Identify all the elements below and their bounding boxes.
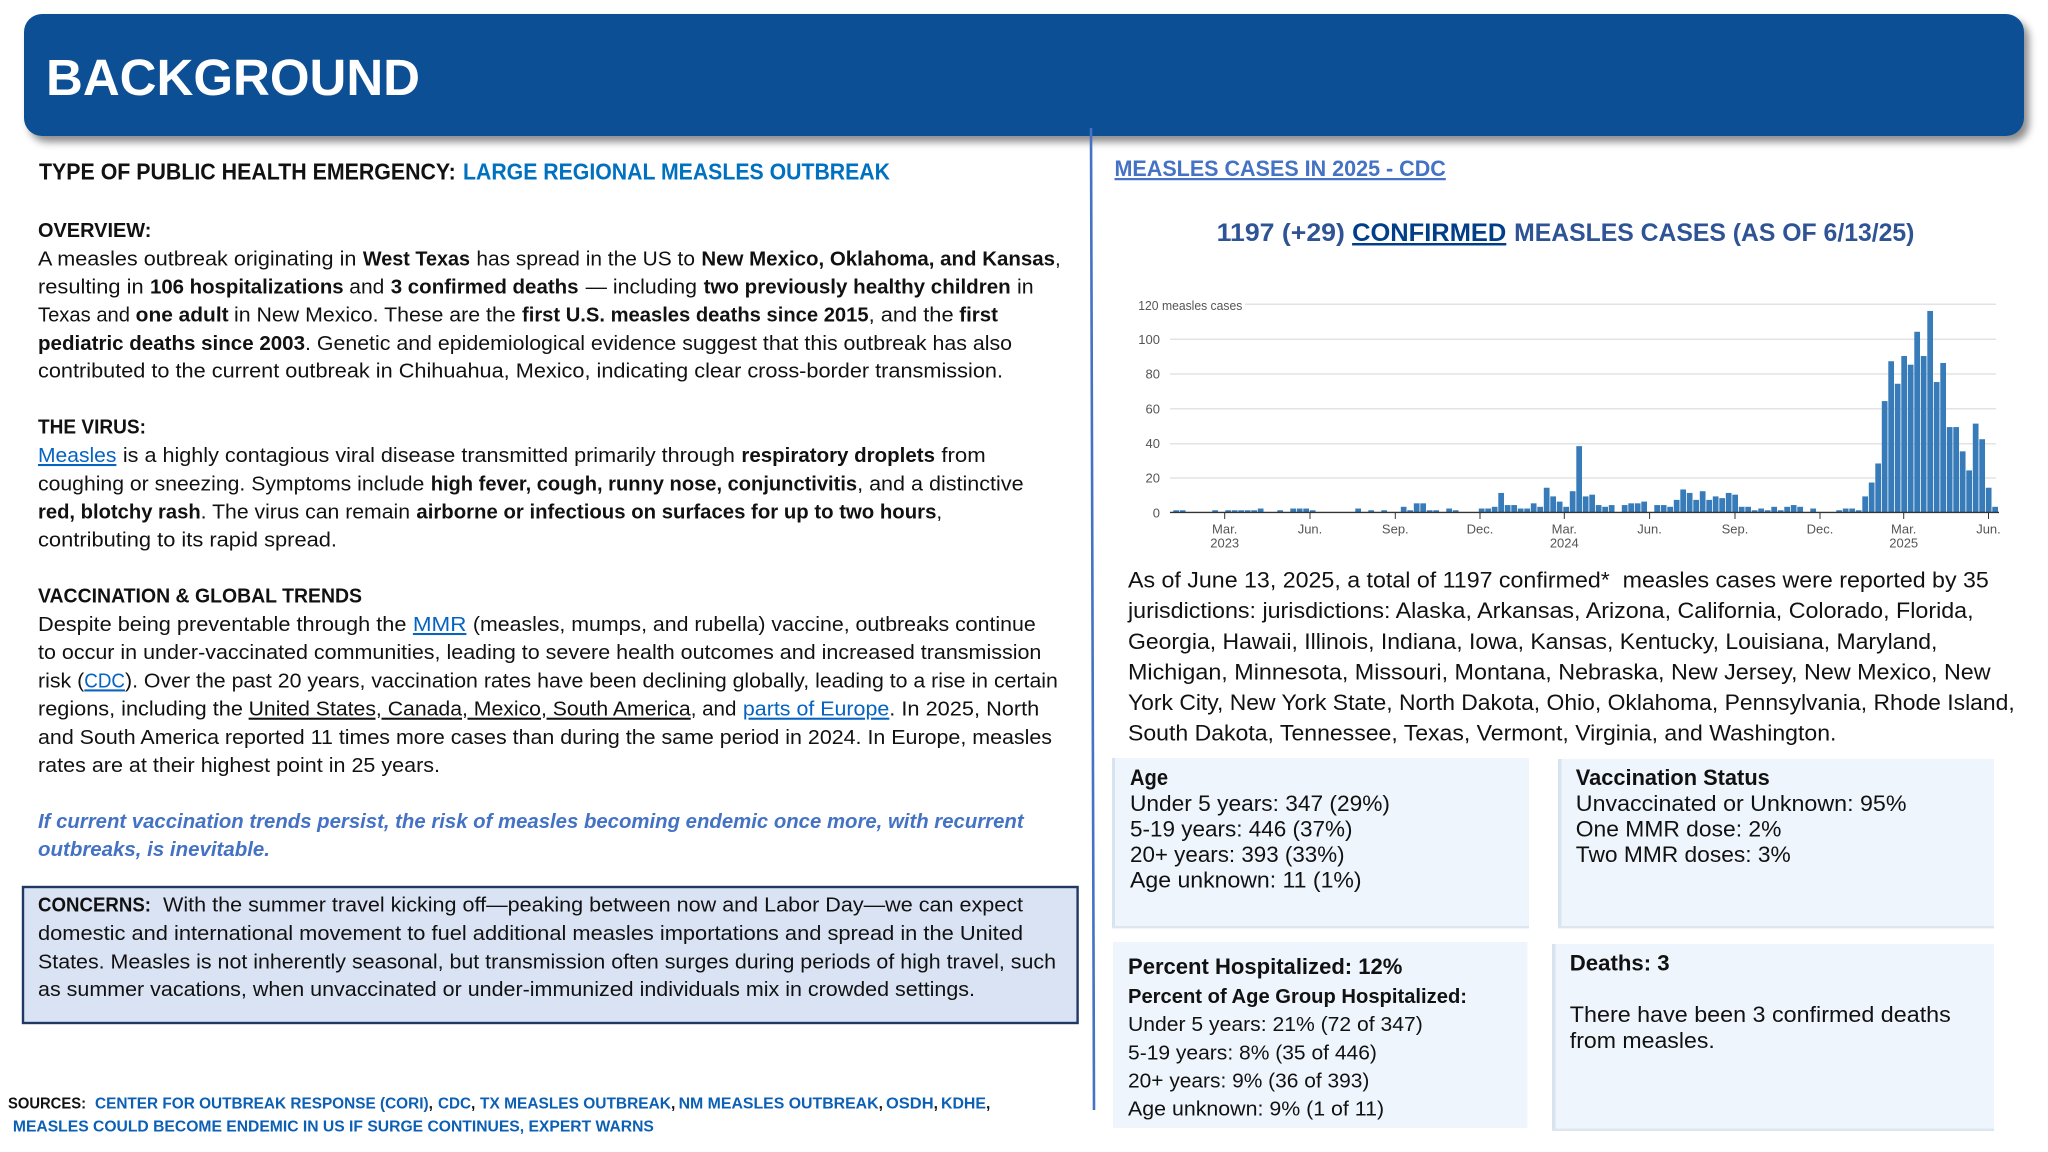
- text block: overview: OVERVIEW:: [38, 219, 151, 242]
- text block: vaccination and global trends: CDC: [84, 669, 125, 692]
- panel: concerns: States. Measles is not inherently seasonal, but transmission often surges during periods of high travel, such: [38, 950, 1056, 973]
- text block: the virus: coughing or sneezing. Symptoms include: [38, 472, 424, 496]
- text block: vaccination and global trends: and South America reported 11 times more cases than during the same period in 2024. In Europe, measles: [38, 726, 1052, 749]
- text block: overview: has spread in the US to: [476, 248, 695, 271]
- text block: overview: in New Mexico. These are the: [234, 304, 516, 327]
- sources: MEASLES COULD BECOME ENDEMIC IN US IF SURGE CONTINUES, EXPERT WARNS: [13, 1119, 654, 1136]
- sources: ,: [671, 1095, 675, 1112]
- text block: overview: . Genetic and epidemiological evidence suggest that this outbreak has also: [305, 332, 1012, 355]
- text block: the virus: is a highly contagious viral disease transmitted primarily through: [123, 444, 735, 467]
- x axis labels: Sep.: [1382, 521, 1409, 536]
- text block: overview: , and the: [869, 304, 954, 327]
- x axis labels: Jun.: [1976, 521, 2001, 536]
- text block: vaccination and global trends: [38, 584, 1058, 777]
- text block: the virus: airborne or infectious on surfaces for up to two hours: [416, 500, 936, 524]
- x axis labels: 2025: [1889, 535, 1918, 550]
- x axis labels: Dec.: [1467, 521, 1493, 536]
- callout: endemic risk statement: outbreaks, is inevitable.: [38, 838, 270, 861]
- text block: the virus: Measles: [38, 444, 116, 467]
- text block: vaccination and global trends: parts of Europe: [743, 698, 889, 721]
- panel: age: 5-19 years: 446 (37%): [1130, 817, 1352, 842]
- panel: percent hospitalized: 20+ years: 9% (36 of 393): [1128, 1069, 1369, 1092]
- text block: overview: first: [959, 304, 998, 327]
- sources: ,: [934, 1095, 938, 1112]
- panel: deaths: [1552, 944, 1994, 1131]
- headline: confirmed cases: 1197 (+29): [1217, 220, 1345, 247]
- text block: vaccination and global trends: VACCINATION & GLOBAL TRENDS: [38, 584, 362, 607]
- y axis labels: 0: [1153, 505, 1160, 520]
- text block: overview: — including: [586, 276, 697, 299]
- text block: overview: pediatric deaths since 2003: [38, 332, 305, 355]
- panel: percent hospitalized: Age unknown: 9% (1 of 11): [1128, 1098, 1384, 1121]
- text block: vaccination and global trends: ). Over the past 20 years, vaccination rates have been declining globally, leading to a rise in certain: [125, 669, 1058, 692]
- text block: the virus: respiratory droplets: [741, 444, 935, 467]
- vertical column divider: [1091, 128, 1094, 1110]
- text block: overview: contributed to the current outbreak in Chihuahua, Mexico, indicating clear cross-border transmission.: [38, 360, 1003, 383]
- header banner: [24, 14, 2024, 136]
- callout: endemic risk statement: If current vaccination trends persist, the risk of measles becoming endemic once more, with recurrent: [38, 810, 1025, 833]
- headline: confirmed cases: [1217, 220, 1914, 247]
- text block: overview: [38, 219, 1061, 383]
- text block: the virus: red, blotchy rash: [38, 500, 201, 524]
- bar chart: weekly measles cases 2023 to 2025: [1138, 298, 2001, 550]
- text block: overview: resulting in: [38, 276, 144, 299]
- headline: confirmed cases: MEASLES CASES (AS OF 6/13/25): [1514, 220, 1914, 247]
- text block: jurisdictions summary: As of June 13, 2025, a total of 1197 confirmed* measles cases were reported by 35: [1128, 567, 1989, 592]
- text block: overview: ,: [1055, 248, 1061, 271]
- text block: overview: and: [349, 276, 384, 299]
- text block: overview: one adult: [136, 304, 229, 327]
- panel: concerns: domestic and international movement to fuel additional measles importations and spread in the United: [38, 922, 1023, 945]
- y axis labels: 100: [1138, 332, 1160, 347]
- panel: percent hospitalized: Under 5 years: 21% (72 of 347): [1128, 1013, 1423, 1036]
- x axis labels: [1210, 521, 2001, 550]
- text block: vaccination and global trends: United States, Canada, Mexico, South America: [249, 698, 691, 721]
- text block: overview: in: [1017, 276, 1034, 299]
- x axis labels: Dec.: [1807, 521, 1833, 536]
- heading: type of public health emergency: TYPE OF PUBLIC HEALTH EMERGENCY:: [39, 159, 456, 185]
- panel: age: Age: [1130, 765, 1168, 790]
- y axis labels: [1138, 298, 1243, 520]
- text block: vaccination and global trends: risk (: [38, 669, 84, 692]
- sources: KDHE: [941, 1095, 986, 1112]
- x axis and ticks: [1170, 512, 1999, 519]
- title: BACKGROUND: [46, 49, 420, 106]
- text block: the virus: high fever, cough, runny nose, conjunctivitis: [431, 472, 857, 496]
- y axis labels: 120 measles cases: [1138, 298, 1243, 313]
- callout: endemic risk statement: [38, 810, 1025, 861]
- x axis labels: Jun.: [1637, 521, 1662, 536]
- text block: vaccination and global trends: to occur in under-vaccinated communities, leading to severe health outcomes and increased transmission: [38, 641, 1041, 664]
- sources: ,: [879, 1095, 883, 1112]
- y axis labels: 20: [1146, 470, 1160, 486]
- panel: concerns: as summer vacations, when unvaccinated or under-immunized individuals mix in crowded settings.: [38, 978, 975, 1001]
- x axis labels: 2024: [1550, 535, 1579, 550]
- text block: the virus: THE VIRUS:: [38, 416, 146, 438]
- text block: vaccination and global trends: MMR: [413, 613, 466, 636]
- y axis labels: 40: [1146, 436, 1160, 451]
- text block: vaccination and global trends: Despite being preventable through the: [38, 613, 406, 636]
- text block: jurisdictions summary: jurisdictions: jurisdictions: Alaska, Arkansas, Arizona, California, Colorado, Florida,: [1127, 598, 1974, 623]
- panel: deaths: from measles.: [1570, 1028, 1715, 1053]
- text block: vaccination and global trends: (measles, mumps, and rubella) vaccine, outbreaks continue: [473, 613, 1036, 636]
- panel: concerns: [23, 887, 1078, 1023]
- panel: deaths: Deaths: 3: [1570, 951, 1670, 976]
- sources: TX MEASLES OUTBREAK: [480, 1095, 672, 1112]
- text block: overview: Texas and: [38, 304, 130, 327]
- text block: jurisdictions summary: York City, New York State, North Dakota, Ohio, Oklahoma, Pennsylvania, Rhode Island,: [1128, 690, 2015, 715]
- panel: percent hospitalized: [1113, 942, 1528, 1128]
- text block: the virus: from: [941, 444, 986, 467]
- heading: type of public health emergency: LARGE REGIONAL MEASLES OUTBREAK: [463, 159, 890, 185]
- panel: age: [1112, 758, 1529, 928]
- text block: overview: West Texas: [363, 248, 470, 271]
- text block: the virus: ,: [936, 500, 942, 524]
- x axis labels: Sep.: [1722, 521, 1748, 536]
- sources: NM MEASLES OUTBREAK: [679, 1095, 879, 1112]
- y axis labels: 60: [1146, 401, 1160, 416]
- panel: age: Age unknown: 11 (1%): [1130, 868, 1362, 893]
- sources: ,: [429, 1095, 433, 1112]
- x axis labels: Jun.: [1298, 521, 1322, 536]
- sources: ,: [471, 1095, 475, 1112]
- panel: percent hospitalized: Percent Hospitalized: 12%: [1128, 954, 1402, 979]
- text block: the virus: [38, 416, 1024, 552]
- text block: overview: A measles outbreak originating in: [38, 248, 356, 271]
- text block: the virus: , and a distinctive: [857, 472, 1024, 496]
- y axis labels: 80: [1146, 367, 1160, 382]
- sources: ,: [986, 1095, 990, 1112]
- sources: OSDH: [886, 1095, 934, 1112]
- panel: vaccination status: Two MMR doses: 3%: [1576, 842, 1791, 867]
- text block: the virus: contributing to its rapid spread.: [38, 528, 337, 552]
- panel: vaccination status: One MMR dose: 2%: [1576, 817, 1781, 842]
- text block: the virus: . The virus can remain: [201, 500, 410, 524]
- panel: age: Under 5 years: 347 (29%): [1130, 791, 1390, 816]
- panel: deaths: There have been 3 confirmed deaths: [1570, 1002, 1951, 1027]
- text block: overview: two previously healthy children: [704, 276, 1011, 299]
- sources: CENTER FOR OUTBREAK RESPONSE (CORI): [95, 1095, 429, 1112]
- panel: percent hospitalized: 5-19 years: 8% (35 of 446): [1128, 1041, 1377, 1064]
- panel: vaccination status: [1558, 759, 1994, 928]
- panel: vaccination status: Vaccination Status: [1576, 765, 1770, 790]
- text block: jurisdictions summary: Michigan, Minnesota, Missouri, Montana, Nebraska, New Jersey, New Mexico, New: [1128, 659, 1991, 684]
- text block: jurisdictions summary: [1127, 567, 2015, 745]
- text block: overview: New Mexico, Oklahoma, and Kansas: [701, 248, 1055, 271]
- text block: vaccination and global trends: rates are at their highest point in 25 years.: [38, 754, 440, 777]
- text block: vaccination and global trends: regions, including the: [38, 698, 243, 721]
- heading: type of public health emergency: [39, 159, 890, 185]
- headline: confirmed cases: CONFIRMED: [1352, 220, 1506, 247]
- panel: concerns: With the summer travel kicking off—peaking between now and Labor Day—we can expect: [163, 894, 1023, 917]
- text block: vaccination and global trends: , and: [691, 698, 736, 721]
- link heading: measles cases in 2025: MEASLES CASES IN 2025 - CDC: [1114, 156, 1446, 181]
- x axis labels: Mar.: [1212, 521, 1237, 536]
- text block: jurisdictions summary: South Dakota, Tennessee, Texas, Vermont, Virginia, and Washington.: [1128, 720, 1836, 745]
- panel: concerns: CONCERNS:: [38, 894, 151, 917]
- text block: overview: 3 confirmed deaths: [391, 276, 579, 299]
- panel: vaccination status: Unvaccinated or Unknown: 95%: [1576, 791, 1906, 816]
- text block: overview: 106 hospitalizations: [150, 276, 344, 299]
- panel: percent hospitalized: Percent of Age Group Hospitalized:: [1128, 985, 1467, 1008]
- text block: vaccination and global trends: . In 2025, North: [889, 698, 1039, 721]
- sources: SOURCES:: [8, 1095, 86, 1112]
- sources: CDC: [438, 1095, 471, 1112]
- x axis labels: Mar.: [1552, 521, 1577, 536]
- x axis labels: 2023: [1210, 535, 1239, 550]
- text block: jurisdictions summary: Georgia, Hawaii, Illinois, Indiana, Iowa, Kansas, Kentucky, Louisiana, Maryland,: [1128, 629, 1937, 654]
- sources: [8, 1095, 990, 1136]
- panel: age: 20+ years: 393 (33%): [1130, 842, 1345, 867]
- text block: overview: first U.S. measles deaths since 2015: [522, 304, 869, 327]
- x axis labels: Mar.: [1891, 521, 1916, 536]
- bars: [1173, 311, 1998, 512]
